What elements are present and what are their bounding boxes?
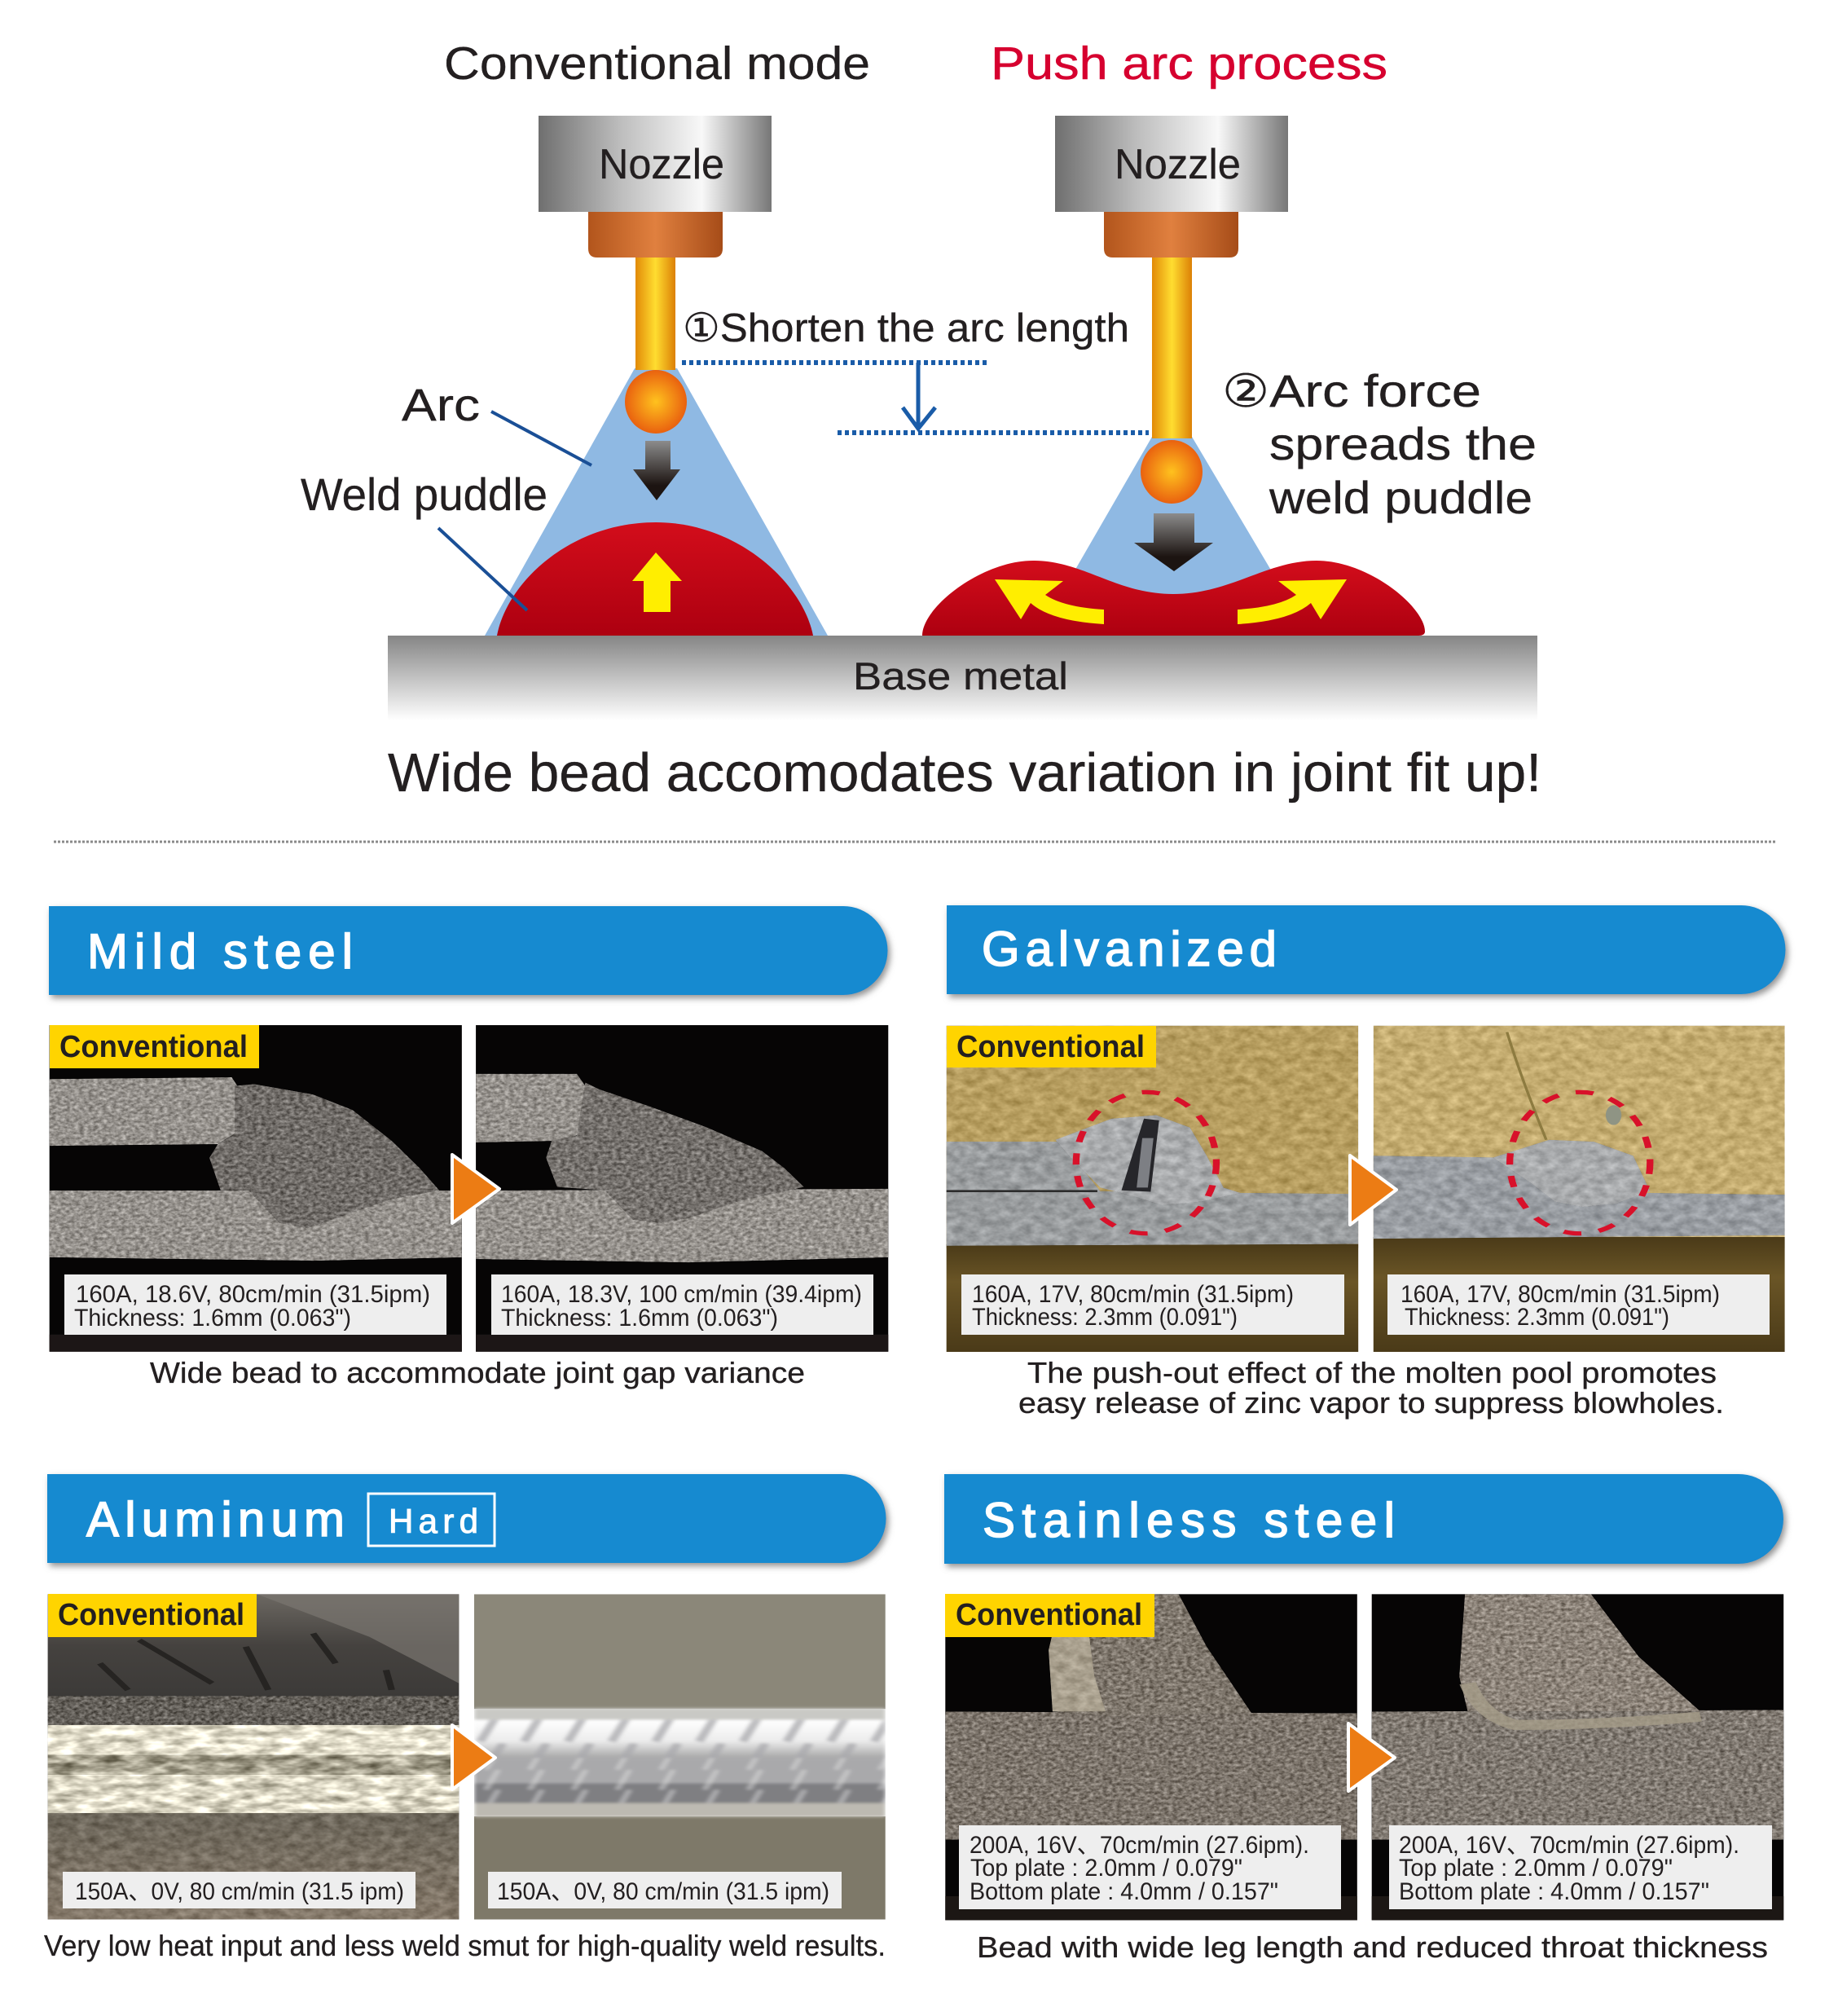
parameter box: conventional: Top plate : 2.0mm / 0.079"	[970, 1855, 1242, 1882]
label: weld puddle	[301, 469, 547, 610]
parameter box: push arc: 150A、0V, 80 cm/min (31.5 ipm)	[497, 1878, 829, 1905]
wire	[635, 258, 675, 370]
header bar: Mild steel	[87, 924, 353, 979]
caption: Very low heat input and less weld smut for high-quality weld results.	[44, 1929, 886, 1962]
nozzle: Nozzle	[1115, 141, 1241, 188]
photo: conventional bead	[48, 1594, 459, 1920]
weld puddle	[922, 561, 1425, 636]
arc cone	[485, 368, 828, 636]
photo: push arc cross-section	[1372, 1594, 1783, 1920]
caption: Bead with wide leg length and reduced throat thickness	[977, 1930, 1768, 1964]
parameter box: push arc: 160A, 18.3V, 100 cm/min (39.4ipm)	[501, 1281, 862, 1308]
yellow up arrow	[632, 552, 682, 612]
panel: stainless steel	[944, 1474, 1783, 1964]
header bar: Stainless steel	[983, 1493, 1395, 1547]
torch: push arc	[922, 116, 1425, 636]
tag: hard	[368, 1494, 495, 1546]
parameter box: conventional: 160A, 18.6V, 80cm/min (31.5ipm)	[76, 1281, 430, 1308]
arrow	[1350, 1155, 1396, 1225]
arc cone	[1058, 437, 1288, 599]
parameter box: conventional: Thickness: 2.3mm (0.091")	[972, 1304, 1238, 1331]
arrow	[1348, 1723, 1395, 1791]
panel: aluminum	[44, 1474, 886, 1962]
dashed highlight circle	[1076, 1092, 1216, 1234]
tag: conventional: Conventional	[58, 1598, 244, 1632]
panel: galvanized	[947, 905, 1785, 1420]
nozzle	[1055, 116, 1288, 212]
header bar	[49, 906, 888, 995]
caption: easy release of zinc vapor to suppress blowholes.	[1018, 1386, 1724, 1420]
parameter box: conventional: 200A, 16V、70cm/min (27.6ipm).	[970, 1832, 1309, 1859]
arrow	[452, 1725, 495, 1789]
downward arrow	[1134, 513, 1213, 571]
downward arrow	[633, 441, 680, 500]
parameter box: conventional	[64, 1274, 446, 1335]
weld puddle	[497, 522, 813, 636]
label: shorten the arc length: ①Shorten the arc length	[683, 306, 1129, 350]
heading: conventional mode: Conventional mode	[444, 37, 870, 90]
parameter box: push arc: Top plate : 2.0mm / 0.079"	[1399, 1855, 1673, 1882]
label: arc force spreads the weld puddle: ②Arc force	[1222, 365, 1481, 416]
contact tip	[1104, 212, 1238, 258]
nozzle: Nozzle	[599, 141, 724, 188]
photo: push arc bead	[1374, 1026, 1785, 1352]
arrow	[452, 1155, 499, 1223]
yellow curved arrow left	[995, 579, 1104, 624]
photo: push arc bead	[474, 1594, 886, 1920]
parameter box: conventional: Bottom plate : 4.0mm / 0.157"	[970, 1878, 1278, 1905]
parameter box: push arc	[1387, 1274, 1770, 1335]
label: arc force spreads the weld puddle: weld puddle	[1269, 472, 1532, 523]
tag: conventional: Conventional	[956, 1598, 1142, 1632]
header bar: Galvanized	[982, 922, 1277, 976]
parameter box: push arc: Thickness: 1.6mm (0.063")	[501, 1305, 778, 1332]
parameter box: push arc	[1389, 1825, 1772, 1909]
caption	[1018, 1356, 1724, 1420]
caption: The push-out effect of the molten pool promotes	[1027, 1356, 1717, 1389]
parameter box: push arc: Thickness: 2.3mm (0.091")	[1405, 1304, 1669, 1331]
contact tip	[588, 212, 723, 258]
process diagram	[301, 37, 1541, 803]
photo: conventional cross-section	[945, 1594, 1357, 1920]
label: arc force spreads the weld puddle: spreads the	[1269, 418, 1537, 469]
statement: wide bead: Wide bead accomodates variation in joint fit up!	[388, 742, 1541, 803]
parameter box: push arc: Bottom plate : 4.0mm / 0.157"	[1399, 1878, 1709, 1905]
nozzle	[539, 116, 772, 212]
dashed highlight circle	[1510, 1092, 1650, 1234]
header bar: Aluminum	[86, 1492, 345, 1547]
parameter box: conventional	[961, 1274, 1344, 1335]
parameter box: conventional: 150A、0V, 80 cm/min (31.5 ipm)	[75, 1878, 404, 1905]
header bar	[944, 1474, 1783, 1564]
photo: conventional bead	[947, 1026, 1358, 1352]
header bar	[947, 905, 1785, 994]
tag: conventional: Conventional	[59, 1030, 248, 1064]
parameter box: conventional	[63, 1872, 416, 1908]
parameter box: conventional	[959, 1825, 1341, 1909]
label: arc	[402, 379, 591, 465]
caption: Wide bead to accommodate joint gap variance	[150, 1356, 805, 1389]
parameter box: push arc: 160A, 17V, 80cm/min (31.5ipm)	[1400, 1281, 1720, 1308]
photo: conventional cross-section	[50, 1025, 462, 1352]
parameter box: conventional: 160A, 17V, 80cm/min (31.5ipm)	[972, 1281, 1294, 1308]
parameter box: push arc	[491, 1274, 873, 1335]
droplet	[625, 370, 687, 434]
wire	[1152, 258, 1192, 438]
label: shorten the arc length	[682, 306, 1149, 433]
heading: push arc process: Push arc process	[991, 37, 1387, 90]
base metal: Base metal	[853, 654, 1068, 698]
base metal	[388, 636, 1537, 720]
tag: conventional: Conventional	[956, 1030, 1145, 1064]
panel: mild steel	[49, 906, 888, 1389]
label: weld puddle: Weld puddle	[301, 469, 547, 520]
tag: hard: Hard	[389, 1502, 478, 1540]
header bar	[47, 1474, 886, 1563]
torch: conventional	[485, 116, 828, 636]
yellow curved arrow right	[1238, 579, 1347, 624]
label: arc: Arc	[402, 379, 480, 430]
label: arc force spreads the weld puddle	[1222, 365, 1537, 523]
parameter box: conventional: Thickness: 1.6mm (0.063")	[74, 1305, 351, 1332]
parameter box: push arc: 200A, 16V、70cm/min (27.6ipm).	[1399, 1832, 1739, 1859]
droplet	[1141, 440, 1203, 504]
photo: push arc cross-section	[476, 1025, 888, 1352]
